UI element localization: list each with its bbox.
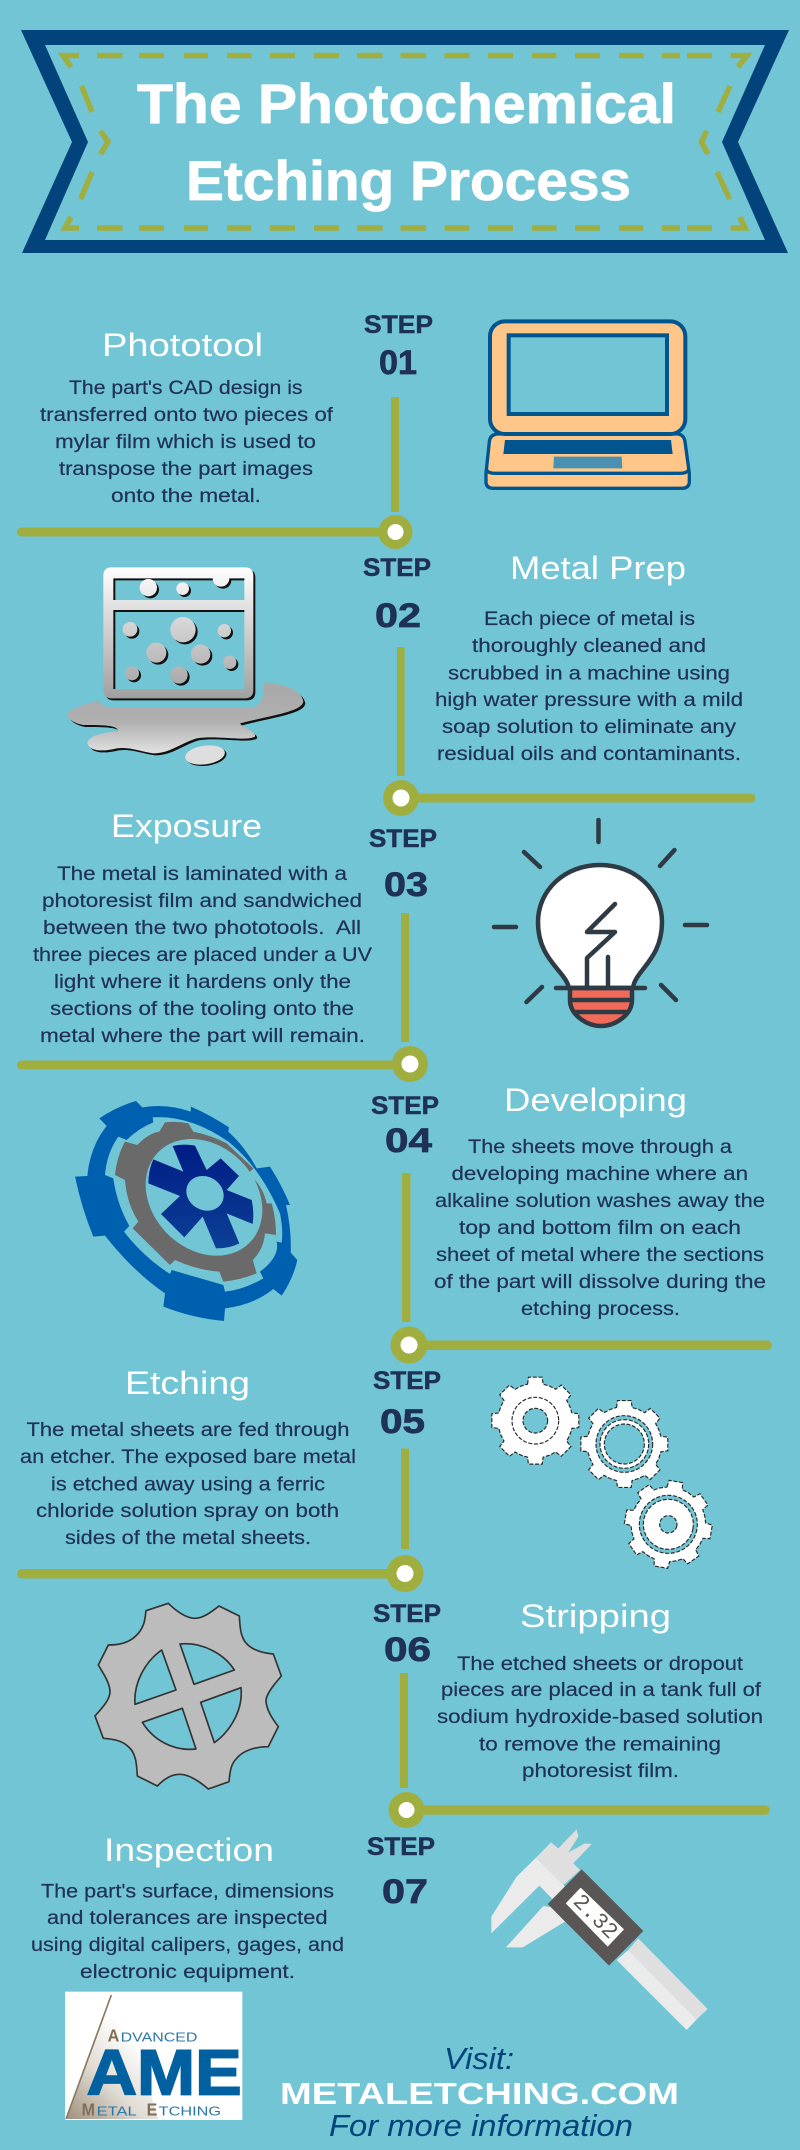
step label 04: STEP	[371, 1092, 439, 1120]
text block: The metal sheets are fed through	[26, 1420, 350, 1441]
text block: thoroughly cleaned and	[472, 636, 706, 657]
text block: light where it hardens only the	[54, 972, 351, 993]
text block: scrubbed in a machine using	[448, 664, 730, 684]
step label 07	[367, 1833, 435, 1911]
timeline connector 3	[17, 913, 428, 1082]
step 4 panel	[75, 1082, 772, 1364]
text block: photoresist film and sandwiched	[42, 891, 362, 912]
icon: dishwasher washer with puddle	[67, 567, 305, 768]
step label 03	[369, 825, 437, 904]
title banner	[21, 30, 789, 253]
step label 05: STEP	[373, 1367, 441, 1395]
text block: high water pressure with a mild	[435, 690, 743, 711]
logo: Advanced Metal Etching	[65, 1992, 242, 2120]
logo: Advanced Metal Etching: DVANCED	[121, 2030, 197, 2045]
step label 03: STEP	[369, 825, 437, 853]
step label 07: 07	[382, 1873, 428, 1911]
text block: between the two phototools. All	[43, 918, 361, 939]
text block: soap solution to eliminate any	[442, 717, 737, 738]
heading: Stripping: Stripping	[520, 1598, 671, 1634]
text block: three pieces are placed under a UV	[33, 945, 372, 966]
text block: to remove the remaining	[479, 1734, 721, 1756]
heading: Phototool: Phototool	[102, 327, 263, 363]
text block: transferred onto two pieces of	[40, 405, 334, 426]
logo: Advanced Metal Etching: AME	[87, 2036, 242, 2108]
heading: Etching: Etching	[125, 1365, 250, 1401]
step label 06: STEP	[373, 1600, 441, 1628]
text block: The sheets move through a	[468, 1137, 732, 1158]
logo: Advanced Metal Etching: E	[147, 2100, 157, 2120]
text block: photoresist film.	[522, 1761, 679, 1782]
step label 05	[373, 1367, 441, 1441]
title	[137, 72, 676, 212]
heading: Developing: Developing	[504, 1082, 687, 1118]
logo: Advanced Metal Etching: A	[108, 2026, 120, 2046]
step 7 panel	[31, 1829, 708, 2030]
logo: Advanced Metal Etching: M	[82, 2100, 95, 2120]
footer call to action: For more information	[329, 2108, 633, 2143]
step label 01: 01	[379, 344, 417, 382]
step label 01: STEP	[364, 311, 433, 339]
text block: developing machine where an	[452, 1164, 748, 1185]
icon: digital caliper: 2.32	[567, 1890, 622, 1945]
text block: mylar film which is used to	[55, 432, 316, 453]
text block: electronic equipment.	[80, 1962, 295, 1983]
icon: light bulb	[494, 820, 707, 1026]
text block	[40, 378, 334, 507]
step 3 panel	[17, 808, 707, 1082]
step label 06	[373, 1600, 441, 1669]
footer call to action: Visit:	[444, 2041, 514, 2076]
heading: Exposure: Exposure	[111, 808, 262, 844]
timeline connector 2	[383, 647, 756, 816]
text block: Each piece of metal is	[484, 609, 695, 630]
title: Etching Process	[186, 149, 631, 212]
text block: residual oils and contaminants.	[437, 744, 741, 765]
text block	[435, 609, 743, 765]
text block: The part's surface, dimensions	[41, 1882, 334, 1902]
text block: metal where the part will remain.	[40, 1026, 365, 1047]
footer call to action	[280, 2041, 679, 2143]
footer call to action: METALETCHING.COM	[280, 2076, 679, 2111]
text block: of the part will dissolve during the	[434, 1272, 766, 1293]
text block	[33, 864, 372, 1047]
step label 02	[363, 554, 431, 635]
icon: three white dashed gears	[492, 1377, 719, 1575]
text block: using digital calipers, gages, and	[31, 1935, 344, 1956]
text block	[20, 1420, 356, 1549]
heading: Inspection: Inspection	[104, 1832, 274, 1868]
step label 07: STEP	[367, 1833, 435, 1861]
logo: Advanced Metal Etching: TCHING	[159, 2104, 221, 2119]
text block: The etched sheets or dropout	[457, 1654, 744, 1675]
text block: The part's CAD design is	[69, 378, 302, 399]
text block: chloride solution spray on both	[36, 1501, 339, 1522]
text block: top and bottom film on each	[459, 1218, 741, 1239]
step label 02: 02	[375, 597, 421, 635]
banner ribbon	[21, 30, 789, 253]
step 2 panel	[67, 550, 756, 816]
gear right	[618, 1474, 719, 1575]
timeline connector 4	[390, 1173, 772, 1364]
step label 04	[371, 1092, 439, 1160]
title: The Photochemical	[137, 72, 676, 135]
text block	[31, 1882, 344, 1983]
text block: sodium hydroxide-based solution	[437, 1707, 763, 1728]
banner stitched dashes	[63, 56, 747, 228]
text block: etching process.	[521, 1299, 680, 1320]
text block: onto the metal.	[111, 486, 261, 507]
text block: and tolerances are inspected	[47, 1908, 328, 1929]
heading: Metal Prep: Metal Prep	[510, 550, 686, 586]
text block	[434, 1137, 766, 1320]
icon: laptop	[486, 321, 689, 488]
step label 05: 05	[380, 1403, 425, 1441]
text block: sections of the tooling onto the	[50, 999, 354, 1020]
step label 04: 04	[385, 1122, 432, 1160]
step 6 panel	[95, 1598, 770, 1828]
logo: Advanced Metal Etching: ETAL	[97, 2104, 137, 2119]
text block	[437, 1654, 763, 1782]
text block: transpose the part images	[59, 459, 313, 480]
timeline connector 1	[17, 397, 412, 549]
text block: pieces are placed in a tank full of	[441, 1680, 762, 1701]
text block: an etcher. The exposed bare metal	[20, 1447, 356, 1468]
step label 03: 03	[384, 866, 428, 904]
gear middle	[581, 1401, 668, 1487]
gear left	[492, 1377, 579, 1464]
step label 06: 06	[384, 1631, 431, 1669]
step label 01	[364, 311, 433, 382]
text block: sheet of metal where the sections	[436, 1245, 764, 1266]
timeline connector 5	[17, 1448, 424, 1592]
step 1 panel	[17, 311, 689, 549]
step 5 panel	[17, 1365, 719, 1592]
timeline connector 6	[388, 1673, 770, 1828]
text block: sides of the metal sheets.	[65, 1528, 311, 1549]
text block: alkaline solution washes away the	[435, 1191, 765, 1212]
step label 02: STEP	[363, 554, 431, 582]
icon: blue and grey gear wheel	[75, 1101, 297, 1321]
text block: The metal is laminated with a	[57, 864, 348, 885]
text block: is etched away using a ferric	[51, 1474, 325, 1496]
icon: digital caliper	[491, 1829, 708, 2030]
icon: grey gear with four windows	[95, 1603, 281, 1789]
